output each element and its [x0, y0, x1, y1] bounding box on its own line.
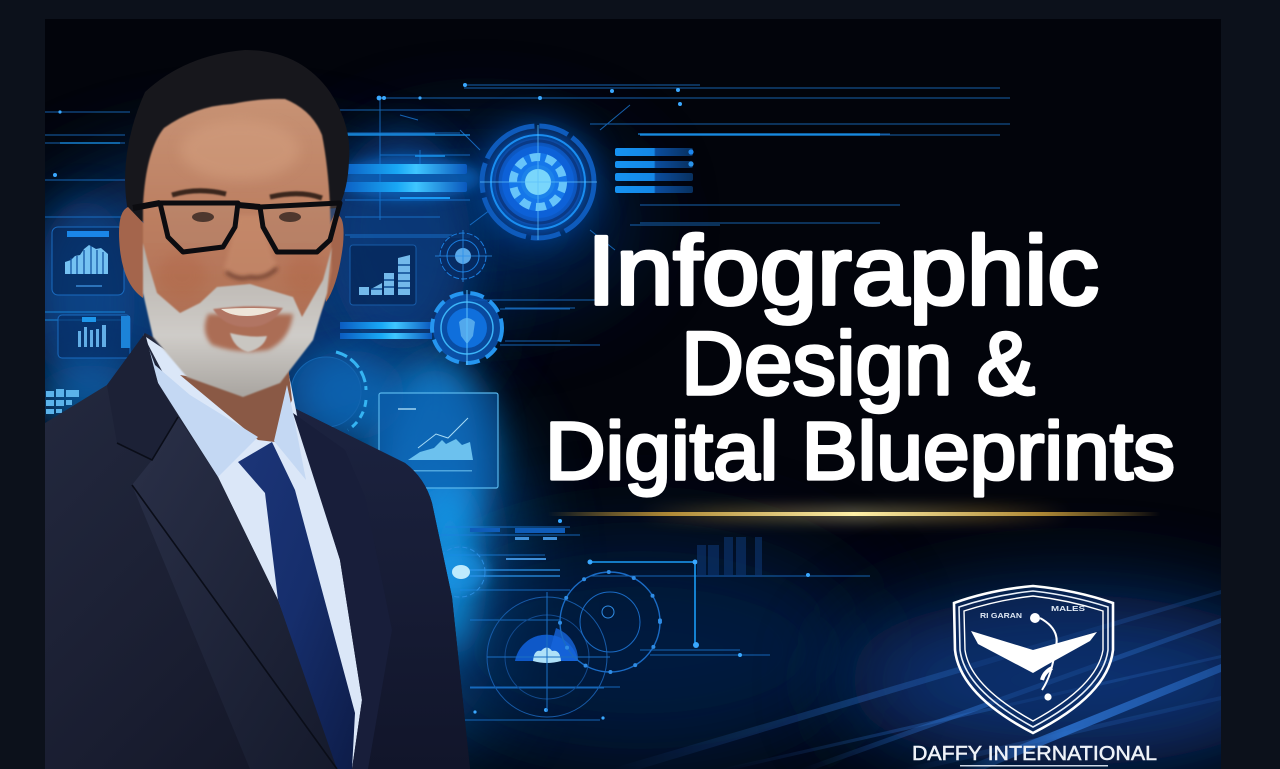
chin skin [205, 314, 293, 352]
small data labels [470, 528, 565, 560]
glasses [133, 203, 340, 252]
bright circuit accents [45, 134, 880, 645]
title line 2: Design & [681, 313, 1035, 413]
arc dial [291, 352, 366, 430]
dotted ring dial [560, 572, 660, 672]
lips [213, 306, 283, 327]
chevron wings [971, 631, 1097, 673]
small ring emblem [435, 230, 492, 282]
radar dial [487, 592, 610, 717]
eyebrows [172, 191, 322, 198]
dim background bars [697, 537, 762, 577]
nose base [226, 268, 277, 278]
title line 3: Digital Blueprints [545, 406, 1175, 497]
shirt collar right [274, 385, 306, 480]
circuit nodes [53, 83, 810, 720]
cheek shading [158, 253, 206, 297]
teeth [221, 308, 277, 316]
bar chart panel [350, 245, 416, 305]
right ear [322, 215, 344, 302]
shield curved label left: RI GARAN [980, 613, 1022, 620]
wordmark underline [960, 765, 1108, 766]
forehead highlight [180, 120, 300, 180]
large ring emblem [432, 290, 502, 365]
area chart panel [379, 393, 498, 488]
light bars middle [340, 322, 432, 339]
shirt collar left [143, 333, 258, 477]
neck [180, 365, 292, 442]
title line 1: Infographic [587, 216, 1099, 325]
gear ring emblem [480, 125, 597, 240]
nose [224, 215, 276, 278]
left chart panel 2 [58, 315, 130, 358]
beard [143, 243, 332, 397]
light rays bottom right [610, 590, 1221, 769]
lapel edge [117, 417, 337, 769]
soul patch [230, 333, 267, 352]
logo wordmark: DAFFY INTERNATIONAL [912, 743, 1157, 765]
shirt [143, 335, 362, 769]
lower small ring with glow [428, 547, 560, 597]
hair [125, 50, 349, 222]
left ear [119, 207, 144, 298]
jacket upper collar [107, 333, 162, 388]
eyes [192, 212, 301, 222]
gold divider [548, 505, 1160, 523]
circuit lines [45, 85, 1010, 720]
left lapel [132, 417, 337, 769]
figure [1030, 613, 1057, 701]
shield inner border [959, 591, 1108, 727]
horizontal light bars top [340, 155, 480, 200]
title [545, 216, 1175, 497]
jacket right side [292, 407, 470, 769]
right lapel [293, 413, 392, 769]
shield curved label right: MALES [1051, 606, 1085, 613]
grid blocks [46, 389, 79, 414]
face [143, 99, 332, 390]
suit jacket [45, 333, 470, 769]
left chart panel 1 [52, 227, 124, 295]
shield outer border [954, 586, 1113, 733]
logo: shield [954, 586, 1113, 733]
progress bars right [615, 148, 694, 193]
tie [238, 442, 355, 769]
presenter portrait [45, 50, 470, 769]
